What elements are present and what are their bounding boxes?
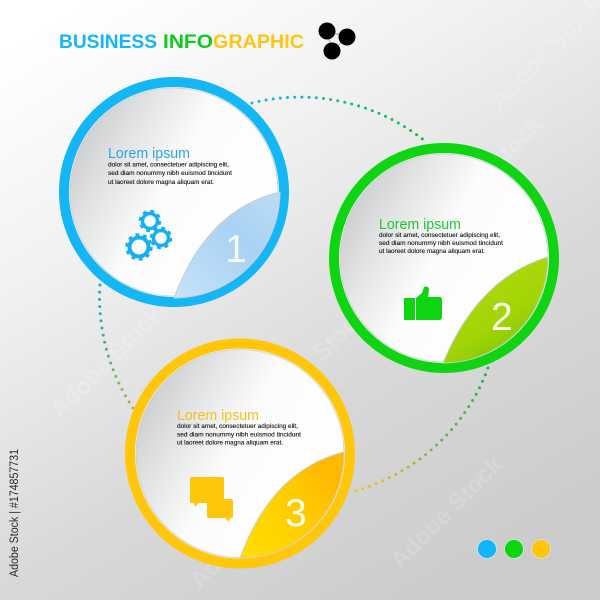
body text 1: ut laoreet dolore magna aliquam erat. [108,179,214,186]
body text 2 [379,232,503,255]
body text 1 [108,162,232,186]
title [59,31,304,53]
title: BUSINESS [59,31,157,53]
number 3: 3 [285,492,307,535]
dotted connector: circle 2 to circle 3 [355,368,488,491]
heading 1: Lorem ipsum [108,146,190,162]
panel: step 2 [334,148,554,368]
body text 3: sed diam nonummy nibh euismod tincidunt [177,432,301,438]
watermark: Adobe Stock [425,111,548,234]
title: GRAPHIC [213,31,304,53]
body text 1: sed diam nonummy nibh euismod tincidunt [108,170,232,177]
body text 2: ut laoreet dolore magna aliquam erat. [379,248,485,255]
watermark: Adobe Stock [185,471,308,594]
curved wedge 2 [443,257,548,363]
curved wedge 3 [240,452,344,558]
icon: chat bubbles [190,477,233,522]
icon: gears [126,211,171,260]
panel: step 1 [64,82,284,302]
heading 2: Lorem ipsum [379,217,461,233]
body text 3 [177,423,301,446]
heading 3: Lorem ipsum [177,408,259,424]
icon: three black dots [318,22,356,60]
body text 1: dolor sit amet, consectetuer adipiscing elit, [108,162,229,168]
panel: step 3 [130,344,350,564]
title: INFO [163,31,213,53]
stock id caption: Adobe Stock | #174857731 [9,449,21,577]
number 2: 2 [491,296,513,339]
icon: thumbs up [404,286,442,320]
watermark: Adobe Stock [45,301,168,424]
number 1: 1 [225,228,247,271]
body text 3: ut laoreet dolore magna aliquam erat. [177,440,283,446]
curved wedge 1 [174,192,280,298]
body text 3: dolor sit amet, consectetuer adipiscing elit, [177,423,298,430]
watermark: Adobe Stock [250,301,373,424]
body text 2: dolor sit amet, consectetuer adipiscing elit, [379,232,500,239]
dotted connector: circle 3 to circle 1 [100,284,133,408]
legend dots [478,540,550,558]
dotted connector: circle 1 to circle 2 [252,97,425,141]
body text 2: sed diam nonummy nibh euismod tincidunt [379,240,503,247]
watermark: Adobe Stock [115,71,238,194]
watermark: Adobe Stock [385,451,508,574]
